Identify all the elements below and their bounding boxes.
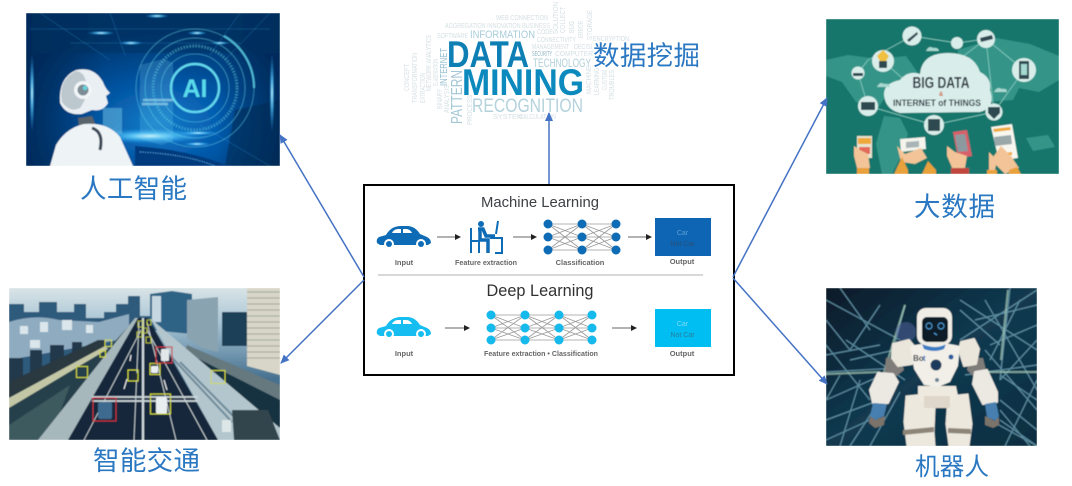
word cloud: data mining: SOFTWARE	[437, 33, 468, 40]
robot	[869, 308, 999, 446]
arrow	[445, 327, 469, 329]
right fence	[150, 318, 280, 440]
word cloud: data mining: EXTRACTION	[420, 73, 427, 103]
word cloud: data mining: LEARNING	[594, 68, 601, 95]
torso	[910, 343, 960, 387]
arrow: to robots	[733, 278, 827, 384]
arrow: to big data	[733, 98, 827, 277]
word cloud: data mining: CUSTOM	[602, 70, 609, 90]
word cloud: data mining: CODE	[537, 29, 553, 36]
heading: machine learning: Machine Learning	[481, 194, 599, 211]
head	[917, 308, 952, 345]
cloud	[884, 53, 992, 113]
word cloud: data mining: COMPUTER	[555, 51, 593, 58]
heading: deep learning: Deep Learning	[486, 282, 594, 300]
label: smart traffic: 智能交通	[93, 446, 200, 476]
captions: deep learning steps: Output	[670, 349, 695, 358]
captions: deep learning steps: Feature extraction • Classification	[484, 349, 598, 358]
label inside photo: AI: AI	[182, 75, 208, 103]
photo: big data and internet of things	[826, 19, 1059, 174]
word cloud: data mining: MINING	[462, 62, 584, 103]
icon circles	[852, 26, 1036, 135]
panel contents	[377, 194, 711, 358]
word cloud: data mining: CALCULATION	[519, 114, 556, 121]
captions: machine learning steps: Classification	[556, 258, 605, 267]
shoulders	[892, 340, 914, 366]
icon: person at desk	[471, 221, 502, 253]
word cloud: data mining: TROUBLES	[609, 70, 616, 100]
photo: big data and internet of things: INTERNET of THINGS	[893, 98, 981, 108]
word cloud: data mining: INFORMATION	[470, 29, 535, 41]
word cloud: data mining: MANAGEMENT	[532, 44, 570, 51]
word cloud: data mining: WEB CONNECTION	[496, 15, 548, 22]
word cloud: data mining: BUG	[569, 21, 576, 33]
captions: deep learning steps	[395, 349, 695, 358]
label: robots: 机器人	[915, 453, 989, 481]
centre road fence left	[38, 318, 138, 440]
photo: big data and internet of things: BIG DATA	[912, 75, 970, 92]
icon: light blue car input	[377, 317, 431, 339]
word cloud: data mining: CONCEPT	[404, 63, 411, 91]
arrow: to smart traffic	[281, 280, 364, 363]
word cloud: data mining	[404, 2, 629, 125]
output box: machine learning	[655, 218, 711, 256]
output box: deep learning: Not Car	[670, 332, 695, 339]
word cloud: data mining: ENCRYPTION	[593, 36, 629, 43]
word cloud: data mining: STORAGE	[587, 10, 594, 40]
arrow	[437, 236, 460, 238]
word cloud: data mining: SECURITY	[532, 51, 552, 58]
word cloud: data mining: DATA	[447, 34, 529, 75]
word cloud: data mining: MACHINE	[586, 66, 593, 94]
word cloud: data mining: ERROR	[578, 21, 585, 38]
word cloud: data mining: ANALYSIS	[444, 85, 451, 113]
captions: deep learning steps: Input	[395, 349, 414, 358]
word cloud: data mining: ELABORATION	[433, 59, 440, 86]
chart: classification neural network	[544, 220, 620, 254]
pelvis	[918, 386, 958, 408]
word cloud: data mining: PATTERN	[449, 70, 466, 124]
output box: machine learning: Car	[677, 230, 689, 237]
output box: deep learning	[655, 309, 711, 347]
word cloud: data mining: INTERNET	[439, 48, 450, 86]
legs	[904, 394, 972, 446]
captions: machine learning steps: Feature extraction	[455, 258, 517, 267]
robot: t	[923, 354, 926, 363]
label: artificial intelligence: 人工智能	[80, 174, 187, 204]
photo: big data and internet of things: &	[939, 92, 944, 98]
hands holding devices	[857, 136, 872, 158]
robot: Bo	[913, 354, 924, 363]
arrow	[612, 327, 636, 329]
chart: deep neural network	[486, 310, 596, 344]
right elevated road	[185, 345, 280, 400]
word cloud: data mining: TECHNOLOGY	[533, 56, 591, 70]
word cloud: data mining: AGGREGATION INNOVATION BUSINESS	[445, 23, 550, 30]
word cloud: data mining: PROCESS	[467, 95, 474, 125]
arrow	[513, 236, 536, 238]
world map	[826, 38, 1059, 174]
word cloud: data mining: NETWORK ANALYTICS	[426, 35, 433, 91]
left elevated road	[9, 340, 105, 398]
arrow: to artificial intelligence	[280, 135, 364, 277]
word cloud: data mining: CONNECTIVITY	[537, 37, 576, 44]
captions: machine learning steps: Output	[670, 257, 695, 266]
output box: machine learning: Not Car	[670, 241, 695, 248]
icon: blue car input	[377, 226, 431, 249]
main road	[68, 318, 218, 440]
label: big data: 大数据	[914, 192, 995, 222]
word cloud: data mining: BINARY	[437, 89, 444, 109]
captions: machine learning steps	[395, 257, 695, 267]
word cloud: data mining: DECISI	[574, 44, 592, 51]
word cloud: data mining: SYSTEM	[493, 114, 523, 121]
photo: smart traffic highway	[9, 288, 280, 440]
label: data mining: 数据挖掘	[593, 41, 700, 71]
arrow: to data mining	[548, 113, 550, 184]
word cloud: data mining: COLLECT	[560, 6, 567, 33]
word cloud: data mining: TRANSFORMATION	[412, 53, 419, 103]
output box: deep learning: Car	[677, 321, 689, 328]
photo: AI robot facing hologram	[26, 13, 280, 166]
photo: white robot on network background	[826, 288, 1037, 446]
word cloud: data mining: RECOGNITION	[472, 96, 583, 117]
panel: machine learning vs deep learning	[364, 185, 734, 375]
captions: machine learning steps: Input	[395, 258, 414, 267]
arrow	[628, 236, 651, 238]
